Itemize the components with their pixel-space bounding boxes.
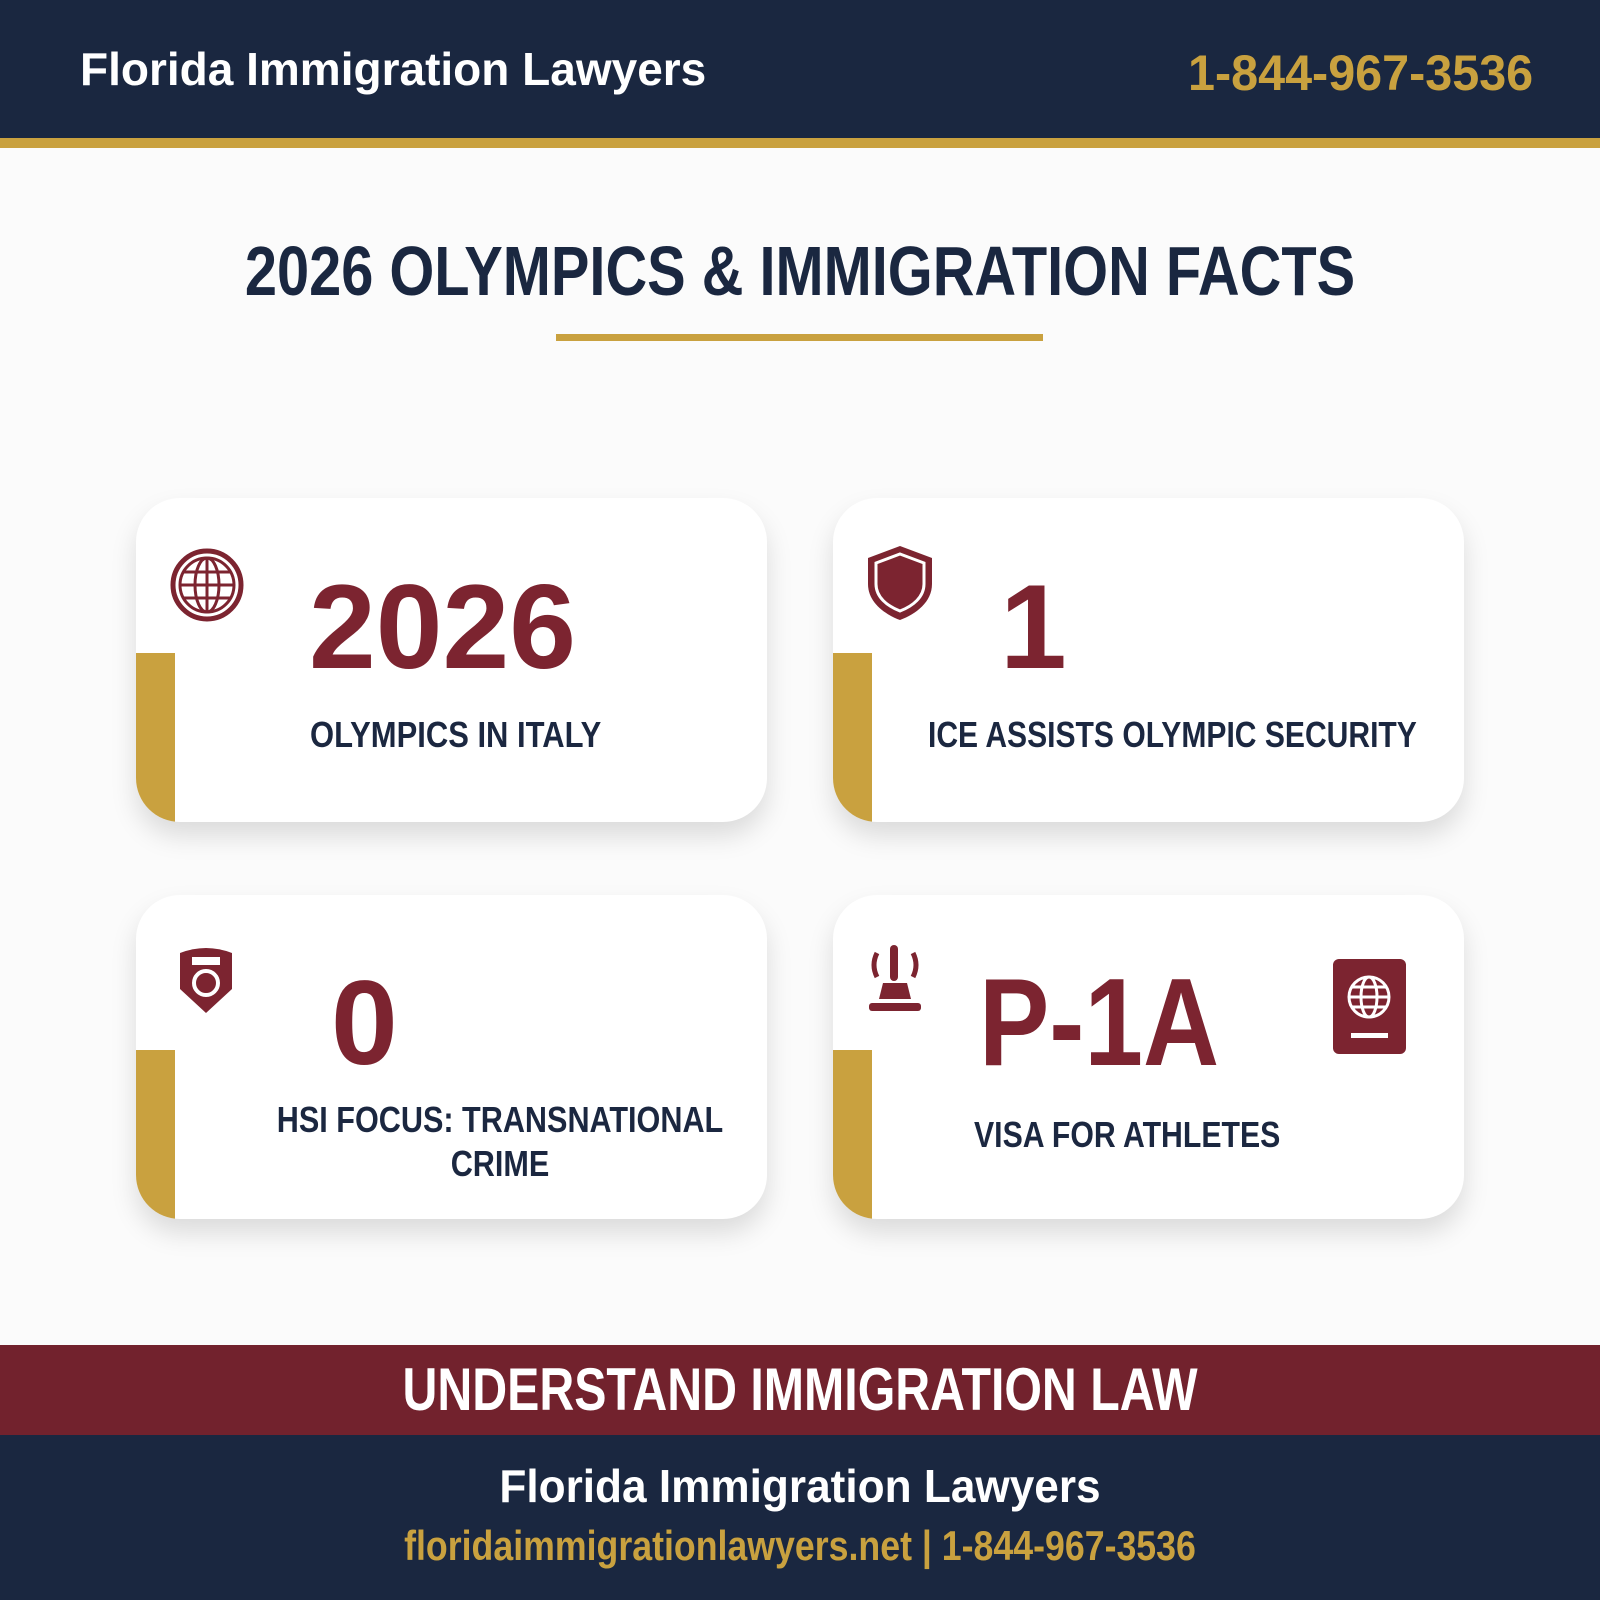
banner: understand immigration law: UNDERSTAND IMMIGRATION LAW (402, 1356, 1198, 1423)
stat number: P-1A (979, 954, 1219, 1092)
header phone: 1-844-967-3536 (1188, 45, 1533, 101)
stat number: 0 (331, 956, 398, 1090)
stat number: 2026 (309, 560, 576, 694)
footer (0, 1435, 1600, 1600)
panel: 2026 olympics (136, 498, 767, 822)
stat label (277, 1099, 723, 1184)
panel: HSI focus (136, 895, 767, 1219)
footer contact: floridaimmigrationlawyers.net | 1-844-967-3536 (404, 1522, 1196, 1569)
stat label: VISA FOR ATHLETES (974, 1114, 1280, 1155)
title: 2026 OLYMPICS & IMMIGRATION FACTS (245, 232, 1355, 310)
header bar (0, 0, 1600, 138)
icon: shield (868, 546, 932, 620)
panel: ICE security (833, 498, 1464, 822)
title underline (556, 334, 1043, 341)
icon: badge (180, 948, 232, 1013)
stat label: OLYMPICS IN ITALY (310, 714, 601, 755)
banner: understand immigration law (0, 1345, 1600, 1435)
footer firm name: Florida Immigration Lawyers (499, 1460, 1101, 1512)
stat label: CRIME (451, 1143, 549, 1184)
stat label: ICE ASSISTS OLYMPIC SECURITY (928, 714, 1417, 755)
header firm name: Florida Immigration Lawyers (80, 43, 706, 95)
stat number: 1 (1000, 560, 1067, 694)
icon: globe (170, 548, 244, 622)
panel: P-1A visa (833, 895, 1464, 1219)
stat label: HSI FOCUS: TRANSNATIONAL (277, 1099, 723, 1140)
icon: stamp (869, 945, 921, 1011)
icon: passport (1333, 959, 1406, 1054)
